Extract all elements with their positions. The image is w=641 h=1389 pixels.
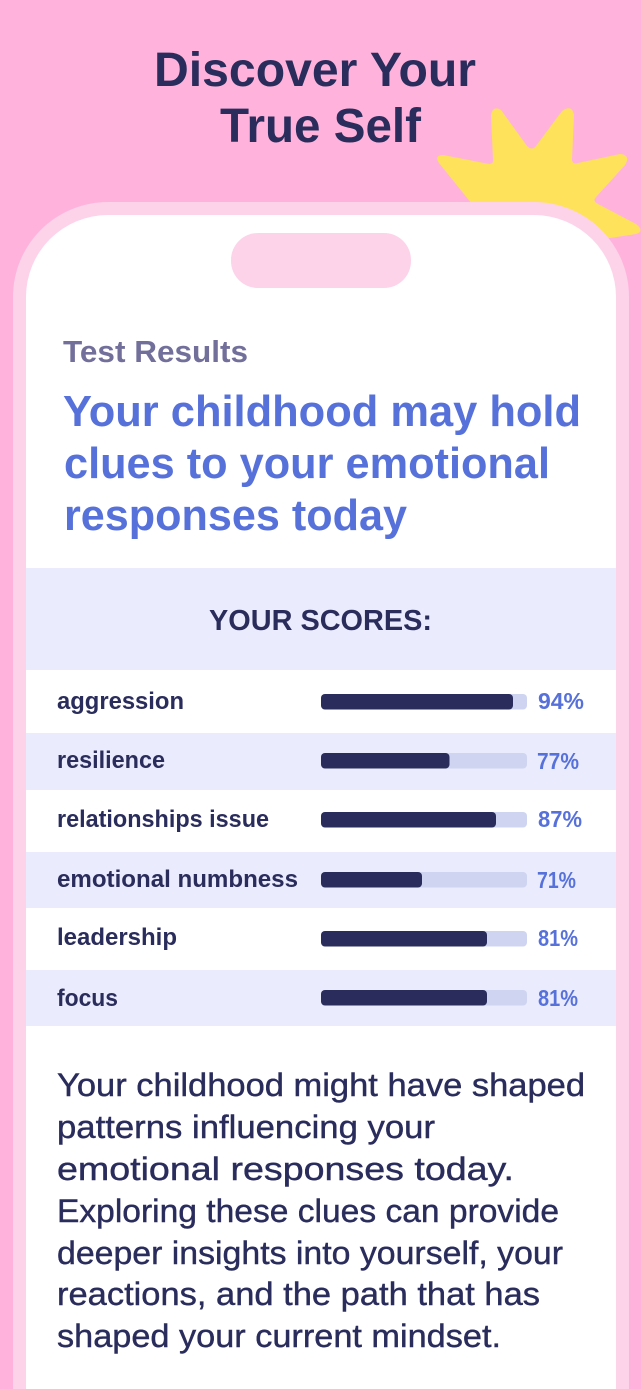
title: True Self <box>220 100 422 153</box>
text: explanation paragraph: patterns influencing your <box>57 1109 435 1145</box>
row: emotional numbness <box>26 852 616 908</box>
text: test results label: Test Results <box>63 334 248 369</box>
heading: results headline: Your childhood may hold <box>63 387 581 436</box>
row: relationships issue: relationships issue <box>57 806 269 833</box>
title <box>154 44 476 153</box>
row: relationships issue: 87% <box>538 806 582 832</box>
row: aggression <box>57 688 584 715</box>
row: leadership <box>57 924 578 951</box>
text: explanation paragraph: Exploring these clues can provide <box>57 1193 559 1229</box>
row: relationships issue <box>57 806 582 833</box>
panel: score rows <box>26 688 616 1026</box>
row: leadership: 81% <box>538 925 578 951</box>
text: explanation paragraph: Your childhood might have shaped <box>57 1067 585 1103</box>
heading: results headline <box>63 387 581 540</box>
row: resilience: 77% <box>537 748 579 774</box>
panel: scores header: YOUR SCORES: <box>209 605 432 637</box>
icon: phone notch <box>231 233 411 288</box>
text: explanation paragraph: shaped your current mindset. <box>57 1318 501 1354</box>
text: explanation paragraph: emotional responses today. <box>57 1151 514 1187</box>
text: explanation paragraph <box>57 1067 585 1354</box>
heading: results headline: responses today <box>64 491 408 540</box>
heading: results headline: clues to your emotional <box>64 439 550 488</box>
row: emotional numbness: emotional numbness <box>57 866 298 893</box>
title: Discover Your <box>154 44 476 97</box>
row: emotional numbness: 71% <box>537 867 576 893</box>
icon: yellow star <box>437 108 640 240</box>
row: leadership: leadership <box>57 924 177 951</box>
panel: scores header <box>26 568 616 670</box>
text: explanation paragraph: deeper insights into yourself, your <box>57 1235 563 1271</box>
row: resilience <box>26 733 616 790</box>
row: focus: focus <box>57 985 118 1012</box>
row: focus: 81% <box>538 985 578 1011</box>
row: resilience: resilience <box>57 747 165 774</box>
row: focus <box>26 970 616 1026</box>
row: aggression: aggression <box>57 688 184 715</box>
row: aggression: 94% <box>538 688 584 714</box>
text: explanation paragraph: reactions, and the path that has <box>57 1276 540 1312</box>
